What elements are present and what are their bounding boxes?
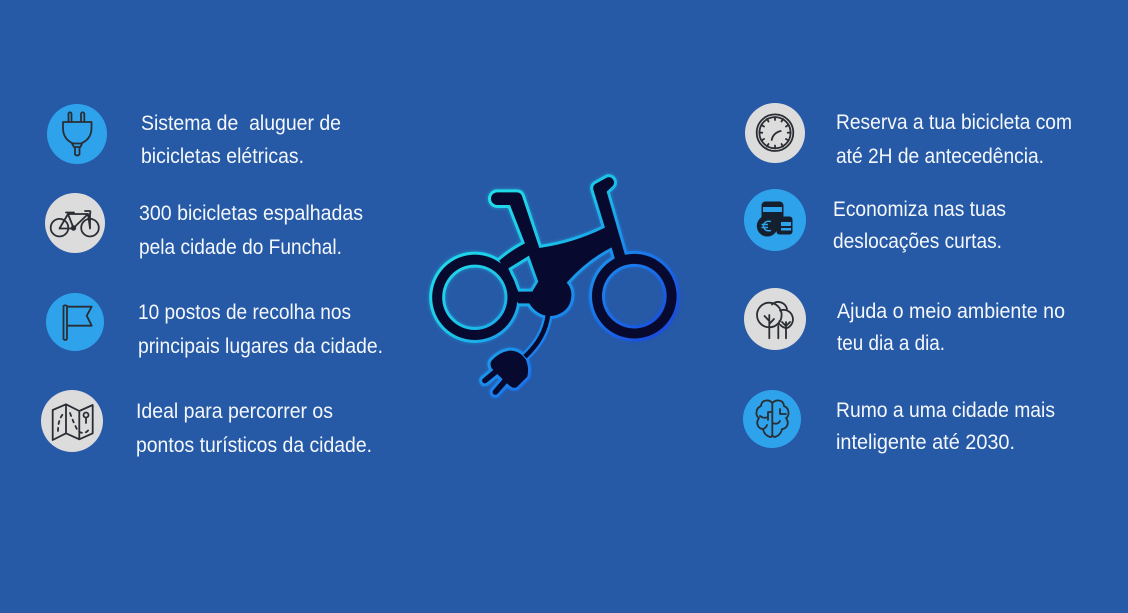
item: economiza: deslocações curtas.: [833, 230, 1002, 253]
text: Rumo a uma cidade mais: [836, 399, 1055, 422]
item: aluguer de bicicletas: bicicletas elétricas.: [141, 145, 304, 168]
icon: clock: [745, 103, 805, 163]
icon: euro coins: [744, 189, 806, 251]
item: reserva: até 2H de antecedência.: [836, 145, 1044, 168]
icon: flag: [46, 293, 104, 351]
text: Ajuda o meio ambiente no: [837, 300, 1065, 323]
text: Reserva a tua bicicleta com: [836, 111, 1072, 134]
text: Ideal para percorrer os: [136, 400, 333, 423]
item: 300 bicicletas: [45, 193, 363, 259]
item: cidade inteligente: [743, 390, 1055, 454]
item: economiza: [744, 189, 1006, 253]
item: pontos turísticos: [41, 390, 372, 457]
item: 10 postos: [46, 293, 383, 358]
icon: trees: [744, 288, 806, 350]
item: aluguer de bicicletas: [47, 104, 341, 168]
icon: map: [41, 390, 103, 452]
text: 300 bicicletas espalhadas: [139, 202, 363, 225]
icon: plug: [47, 104, 107, 164]
text: Economiza nas tuas: [833, 198, 1006, 221]
icon: bicycle: [45, 193, 105, 253]
item: cidade inteligente: inteligente até 2030.: [836, 431, 1015, 454]
item: 300 bicicletas: pela cidade do Funchal.: [139, 236, 342, 259]
text: Sistema de aluguer de: [141, 112, 341, 135]
item: meio ambiente: teu dia a dia.: [837, 332, 945, 355]
item: meio ambiente: [744, 288, 1065, 355]
illustration: electric bicycle with plug: [432, 177, 677, 395]
item: 10 postos: principais lugares da cidade.: [138, 335, 383, 358]
item: pontos turísticos: pontos turísticos da cidade.: [136, 434, 372, 457]
text: 10 postos de recolha nos: [138, 301, 351, 324]
item: reserva: [745, 103, 1072, 168]
icon: brain: [743, 390, 801, 448]
